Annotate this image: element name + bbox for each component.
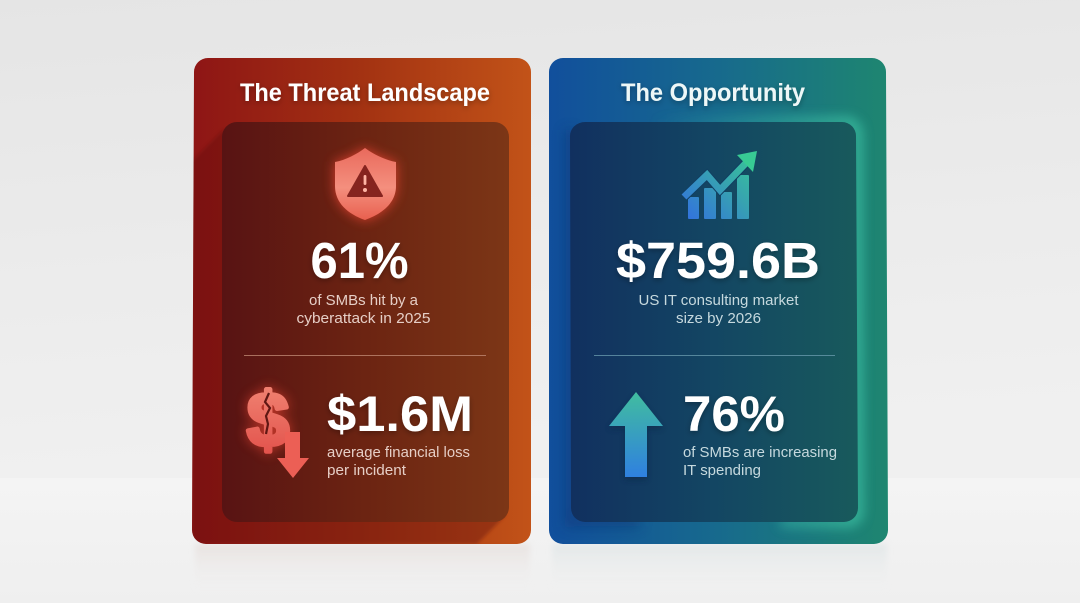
panel: the threat landscape [192,58,531,544]
text: 76% description: of SMBs are increasing [683,444,837,461]
inner panel [570,122,858,522]
text: $759.6B description [638,292,799,327]
icon: growth chart [684,151,757,219]
text: $1.6M description [327,444,470,479]
heading: The Threat Landscape [240,79,490,107]
text: 76% description: IT spending [683,462,761,479]
text: 76% description [683,444,837,479]
text: $1.6M description: per incident [327,462,407,479]
icon: broken dollar with down arrow: $ [247,378,289,463]
background wall [0,0,1080,478]
stat: 61%: 61% [310,232,408,289]
text: 61% description: cyberattack in 2025 [296,310,430,327]
icon: broken dollar with down arrow: $ [247,378,289,463]
icon: shield warning [335,148,396,220]
text: $759.6B description: US IT consulting market [638,292,799,309]
panel: the opportunity [549,58,888,544]
inner panel [222,122,509,522]
stat: $1.6M: $1.6M [327,386,473,442]
heading: The Opportunity [621,79,805,107]
text: $1.6M description: average financial loss [327,444,470,461]
text: $759.6B description: size by 2026 [676,310,761,327]
teal glow behind inner panel [650,122,858,522]
long diagonal shadow of inner panel [192,130,505,544]
stat: 76%: 76% [683,386,785,442]
floor reflection of cards [195,544,887,592]
stat: $759.6B: $759.6B [616,232,820,289]
floor [0,478,1080,603]
icon: broken dollar with down arrow [247,378,309,478]
text: 61% description: of SMBs hit by a [309,292,419,309]
icon: up arrow [609,392,663,480]
text: 61% description [296,292,430,327]
